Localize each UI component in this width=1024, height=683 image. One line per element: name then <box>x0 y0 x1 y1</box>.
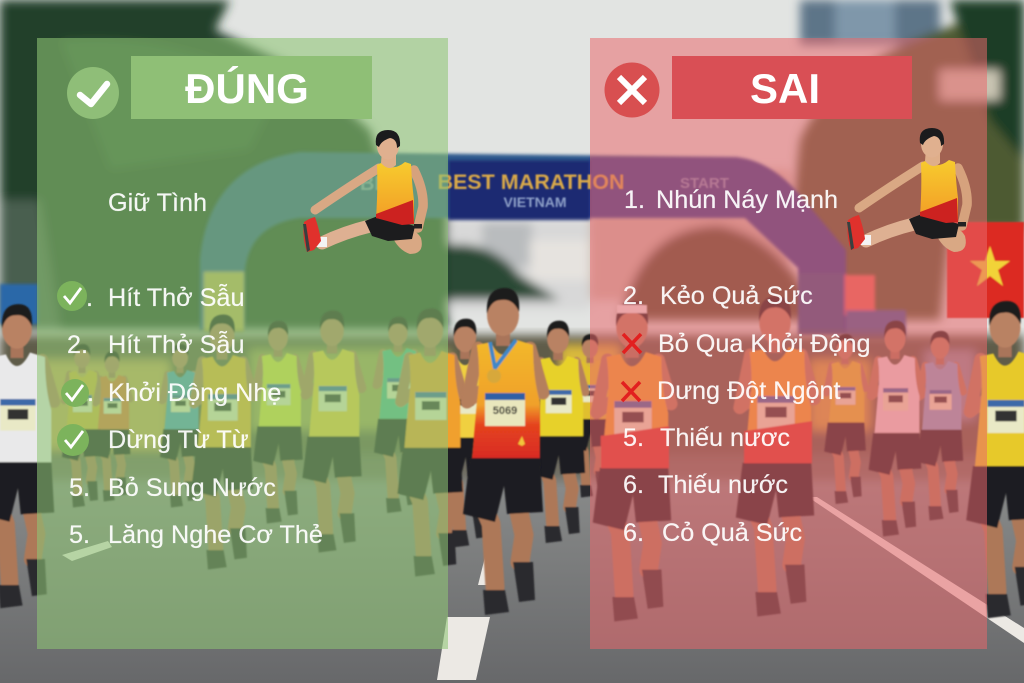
item 3 with cross icon: Bỏ Qua Khởi Động <box>658 330 871 358</box>
distant crowd <box>0 335 1024 480</box>
inflatable arch <box>0 152 906 340</box>
road <box>0 455 1024 683</box>
arch banner text: VIETNAM <box>504 194 566 210</box>
item 5: 5. <box>69 474 90 502</box>
main runner: 5069 <box>493 405 517 417</box>
item 2: Hít Thở Sẫu <box>108 330 244 359</box>
item 1: Nhún Náy Mạnh <box>656 186 838 214</box>
illustration: left athlete stretching <box>303 130 423 254</box>
background runners <box>0 296 1024 622</box>
item 7: Cỏ Quả Sức <box>662 519 802 547</box>
item 4 with check icon: Dừng Từ Từ <box>108 426 249 454</box>
item 3 with check icon: . <box>87 379 94 407</box>
heading: SAI: SAI <box>750 65 820 112</box>
item 1 with check icon: . <box>86 284 93 312</box>
vietnamese flag <box>947 222 1024 318</box>
road markings <box>62 497 1024 680</box>
item 3 with check icon: Khởi Động Nhẹ <box>108 379 281 407</box>
icon: green check badge <box>67 67 119 119</box>
list: correct actions <box>57 189 323 549</box>
item 1 with check icon <box>57 281 244 312</box>
heading: ĐÚNG <box>131 56 372 119</box>
panel: wrong (red overlay) <box>590 38 987 649</box>
main runner <box>463 288 543 615</box>
item 2: Kẻo Quả Sức <box>660 282 813 310</box>
item 1: 1. <box>624 186 645 214</box>
list: wrong actions <box>622 186 871 547</box>
arch banner text: BEST MARATHON <box>437 170 625 194</box>
item 4 with cross icon: Dưng Đột Ngộnt <box>657 377 840 405</box>
arch banner text <box>360 170 729 210</box>
item 6: Thiếu nước <box>658 471 788 499</box>
item 5: Bỏ Sung Nước <box>108 474 276 502</box>
item 5: 5. <box>623 424 644 452</box>
item 6: 5. <box>69 521 90 549</box>
arch banner text: BEST <box>360 173 413 195</box>
item 7: 6. <box>623 519 644 547</box>
heading: SAI <box>672 56 912 119</box>
heading: ĐÚNG: ĐÚNG <box>185 64 309 112</box>
item 1 with check icon: Hít Thở Sẫu <box>108 283 244 312</box>
arch banner text: START <box>680 175 729 192</box>
item 6: 6. <box>623 471 644 499</box>
item 4 with check icon <box>57 424 249 456</box>
icon: red cross badge <box>604 62 660 118</box>
item 5: Thiếu nươc <box>660 424 790 452</box>
item: Giữ Tình: Giữ Tình <box>108 189 207 217</box>
item 2: 2. <box>67 331 88 359</box>
item 6: Lăng Nghe Cơ Thẻ <box>108 521 323 549</box>
illustration: right athlete stretching <box>847 128 967 252</box>
panel: correct (green overlay) <box>37 38 448 649</box>
item 2: 2. <box>623 282 644 310</box>
